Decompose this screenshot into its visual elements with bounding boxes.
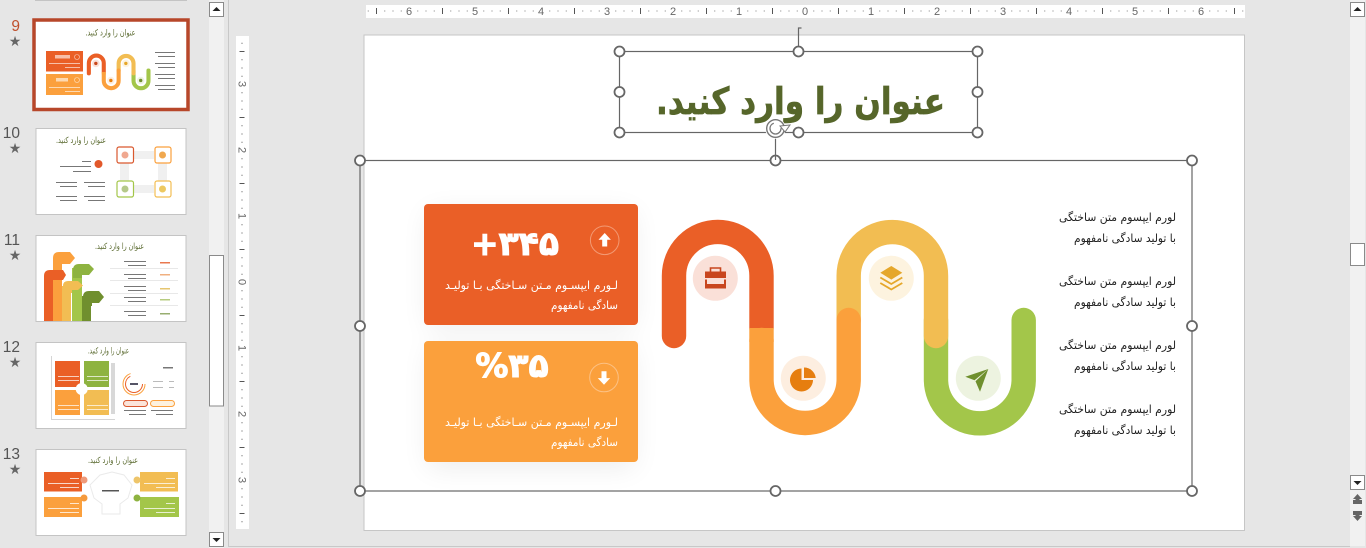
text item 4: لورم ایپسوم متن ساختگی [1059, 402, 1176, 417]
horizontal ruler: 1 [736, 6, 742, 18]
slide number 11 [4, 232, 21, 264]
segment: green [936, 320, 1024, 423]
text item 1 [1059, 210, 1176, 246]
vertical ruler: 2 [236, 147, 248, 153]
big number: %۳۵ [475, 346, 549, 385]
horizontal ruler: 0 [802, 6, 808, 18]
card text [445, 278, 618, 313]
slide number 13 [3, 446, 21, 478]
icon: briefcase [693, 256, 738, 301]
slide number 9: ★ [9, 34, 21, 50]
horizontal ruler: 5 [1132, 6, 1138, 18]
big number: +۳۴۵ [471, 224, 559, 263]
text item 2: لورم ایپسوم متن ساختگی [1059, 274, 1176, 289]
vertical ruler: 3 [236, 81, 248, 87]
thumbnail 9 selected [34, 20, 188, 110]
segment: red [674, 232, 762, 336]
text item 3 [1059, 338, 1176, 374]
text item 1: لورم ایپسوم متن ساختگی [1059, 210, 1176, 225]
horizontal ruler [366, 5, 1245, 18]
rotate handle [767, 120, 790, 160]
vertical ruler: 0 [236, 279, 248, 285]
selection box: content [355, 156, 1197, 496]
horizontal ruler: 3 [604, 6, 610, 18]
thumbnail 13 [36, 450, 186, 536]
vertical ruler: 1 [236, 345, 248, 351]
icon: down arrow [590, 363, 618, 392]
text item 4 [1059, 402, 1176, 438]
card text: لـورم ایپسـوم مـتن سـاختگی بـا تولیـد [445, 415, 618, 430]
icon: paper plane [956, 356, 1001, 401]
right text blocks [1059, 210, 1176, 438]
slide number 13: ★ [9, 462, 21, 478]
previous slide thumbnail edge [35, 0, 187, 1]
segment: yellow [849, 232, 936, 336]
horizontal ruler: 4 [1066, 6, 1072, 18]
left pane scrollbar [209, 0, 224, 548]
vertical ruler [236, 36, 249, 529]
card text: سادگی نامفهوم [551, 435, 618, 450]
title: عنوان را وارد کنید. [656, 80, 945, 123]
thumbnail 12 [36, 342, 186, 428]
thumbnail 11: عنوان را وارد کنید. [95, 242, 144, 252]
horizontal ruler: 2 [934, 6, 940, 18]
thumbnail 10 [36, 128, 186, 214]
selection box: title [614, 28, 982, 138]
text item 4: با تولید سادگی نامفهوم [1074, 423, 1176, 438]
slide number 11: 11 [4, 232, 20, 249]
card text: لـورم ایپسـوم مـتن سـاختگی بـا تولیـد [445, 278, 618, 293]
thumbnail 10: عنوان را وارد کنید. [56, 136, 106, 146]
horizontal ruler: 3 [1000, 6, 1006, 18]
thumbnail 9 selected: عنوان را وارد کنید. [86, 28, 136, 38]
text item 2 [1059, 274, 1176, 310]
horizontal ruler: 6 [406, 6, 412, 18]
card: percent 35 [424, 341, 638, 462]
slide number 9: 9 [11, 18, 20, 35]
winding path chart [674, 232, 1024, 423]
thumbnail 11 [36, 236, 186, 322]
thumbnail 13: عنوان را وارد کنید. [88, 456, 138, 466]
slide number 12: 12 [3, 339, 20, 356]
horizontal ruler: 2 [670, 6, 676, 18]
text item 3: با تولید سادگی نامفهوم [1074, 359, 1176, 374]
horizontal ruler: 5 [472, 6, 478, 18]
slide number 12: ★ [9, 355, 21, 371]
vertical ruler: 3 [236, 477, 248, 483]
orange square top [749, 328, 774, 342]
card: plus 345 [424, 204, 638, 325]
vertical ruler: 2 [236, 411, 248, 417]
card text [445, 415, 618, 450]
horizontal ruler: 4 [538, 6, 544, 18]
slide canvas [364, 35, 1244, 530]
horizontal ruler: 6 [1198, 6, 1204, 18]
slide number 10 [3, 125, 21, 157]
icon: up arrow [590, 226, 619, 255]
icon: layers [869, 256, 914, 301]
card text: سادگی نامفهوم [551, 298, 618, 313]
slide number 11: ★ [9, 248, 21, 264]
card shadows [428, 212, 634, 468]
vertical ruler: 1 [236, 213, 248, 219]
text item 1: با تولید سادگی نامفهوم [1074, 231, 1176, 246]
slide number 13: 13 [3, 446, 20, 463]
icon: pie chart [781, 356, 826, 401]
segment: orange [762, 320, 849, 423]
slide number 10: 10 [3, 125, 20, 142]
text item 2: با تولید سادگی نامفهوم [1074, 295, 1176, 310]
text item 3: لورم ایپسوم متن ساختگی [1059, 338, 1176, 353]
right scrollbar [1350, 0, 1365, 546]
slide number 9 [9, 18, 21, 50]
slide number 12 [3, 339, 21, 371]
horizontal ruler: 1 [868, 6, 874, 18]
slide number 10: ★ [9, 141, 21, 157]
thumbnail 12: عنوان را وارد کنید. [88, 346, 129, 356]
